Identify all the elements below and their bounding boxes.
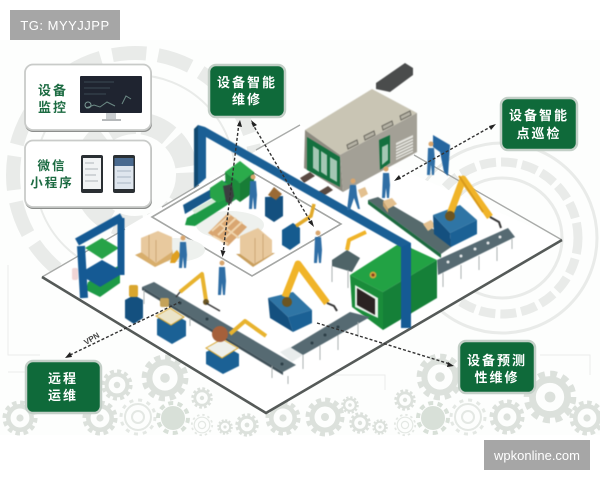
icon: phones (81, 155, 135, 193)
factory floor (42, 125, 562, 413)
building (300, 63, 417, 197)
blue machine boxes in the work zone (265, 187, 314, 250)
green machine (185, 161, 254, 226)
sign: remote operations (26, 361, 101, 413)
dashed arrows between signs and equipment (65, 120, 496, 367)
watermark: bottom-right site (484, 440, 590, 470)
left press machine (72, 217, 122, 298)
sign: smart inspection: 点巡检 (516, 126, 562, 141)
sign: predictive maintenance: 设备预测 (467, 353, 527, 368)
label: WeChat mini program: 微信 (37, 158, 67, 173)
sign: smart maintenance (209, 65, 285, 117)
factory robots and stations (125, 264, 337, 374)
sign: predictive maintenance (459, 341, 535, 393)
watermark: bottom-right site: wpkonline.com (493, 448, 580, 463)
sign: remote operations: 运维 (48, 388, 78, 403)
workers (179, 135, 450, 295)
watermark: top-left tag (10, 10, 120, 40)
sign: remote operations: 远程 (48, 371, 78, 386)
label: equipment monitoring: 设备 (38, 83, 68, 98)
VPN label: VPN (82, 331, 101, 347)
front conveyor (142, 282, 370, 384)
sign: smart maintenance: 维修 (232, 92, 262, 107)
gantry beam (183, 125, 411, 328)
sign: predictive maintenance: 性维修 (474, 370, 520, 385)
background: gear row (5, 357, 600, 435)
icon: monitor (80, 76, 142, 121)
green inspection tunnel (332, 232, 437, 330)
sign: smart maintenance: 设备智能 (217, 75, 277, 90)
sign: smart inspection: 设备智能 (509, 108, 569, 123)
watermark: top-left tag: TG: MYYJJPP (20, 18, 110, 33)
label: equipment monitoring: 监控 (38, 100, 68, 115)
sign: smart inspection (501, 98, 577, 150)
pallets and boxes (135, 213, 275, 267)
panel: equipment monitoring (25, 64, 152, 132)
label: WeChat mini program: 小程序 (30, 175, 74, 190)
back conveyor and robot station (368, 176, 515, 287)
panel: WeChat mini program (25, 140, 152, 209)
